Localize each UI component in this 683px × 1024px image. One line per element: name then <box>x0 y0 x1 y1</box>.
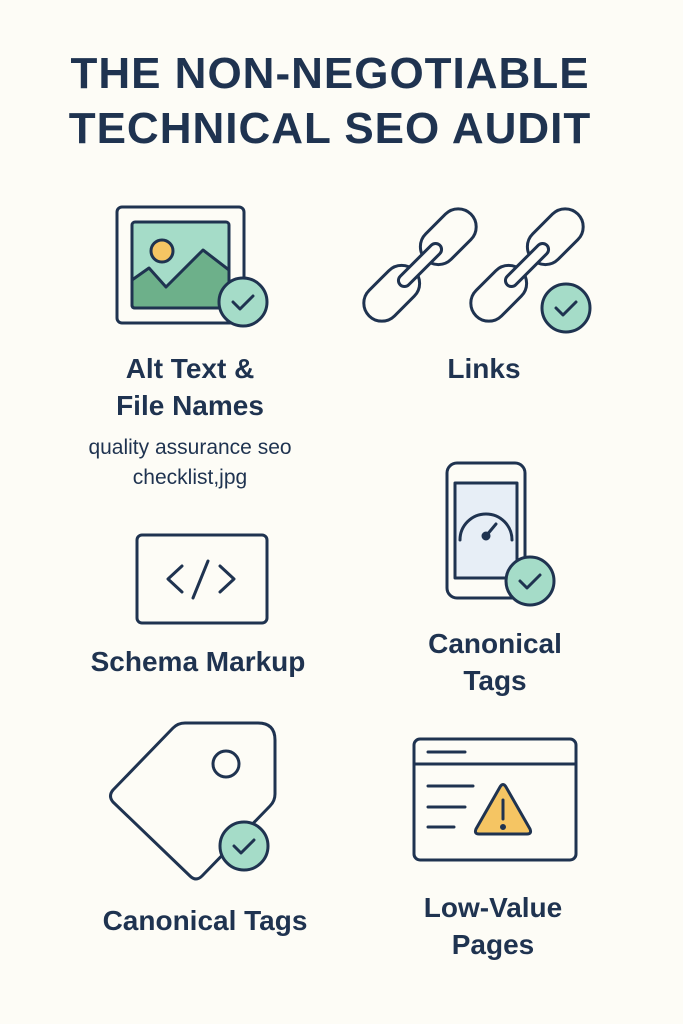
text: filename: checklist,jpg <box>133 466 247 489</box>
label: schema: Schema Markup <box>91 646 305 677</box>
label: alt text: Alt Text & <box>126 353 254 384</box>
title: THE NON-NEGOTIABLE <box>70 49 590 98</box>
label: low-value pages <box>424 892 562 960</box>
label: links: Links <box>447 353 521 384</box>
text: filename: quality assurance seo <box>88 436 292 459</box>
label: low-value pages: Low-Value <box>424 892 562 923</box>
label: canonical tags 1 <box>428 628 562 696</box>
icon: image <box>117 207 267 326</box>
label: canonical tags 1: Tags <box>463 665 527 696</box>
label: alt text <box>116 353 264 421</box>
icon: browser warning <box>414 739 576 860</box>
title: TECHNICAL SEO AUDIT <box>69 104 591 153</box>
label: low-value pages: Pages <box>452 929 534 960</box>
text: filename <box>88 436 292 489</box>
icon: tag <box>110 723 275 879</box>
icon: links <box>356 201 591 332</box>
label: alt text: File Names <box>116 390 264 421</box>
label: canonical tags 2: Canonical Tags <box>103 905 307 936</box>
title <box>69 49 591 153</box>
label: canonical tags 1: Canonical <box>428 628 562 659</box>
icon: code <box>137 535 267 623</box>
icon: phone <box>447 463 554 605</box>
